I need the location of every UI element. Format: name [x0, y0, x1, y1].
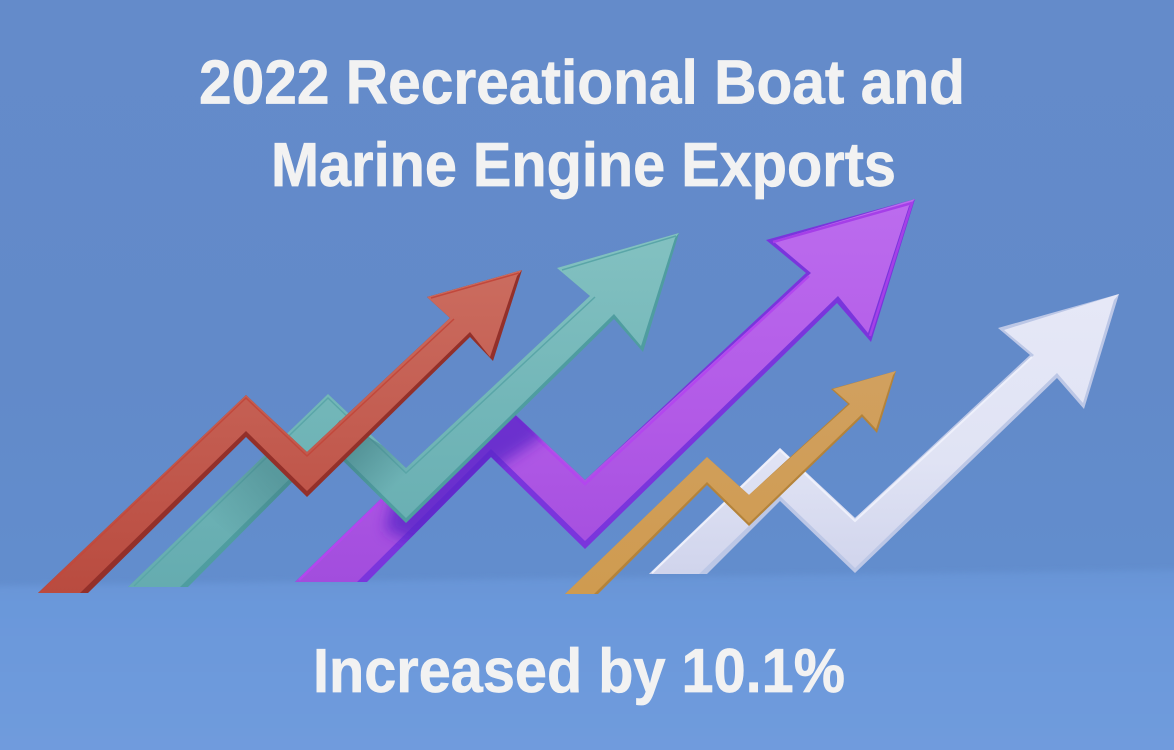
title — [199, 48, 965, 200]
arrow: purple — [295, 199, 915, 582]
callout: increase: Increased by 10.1% — [313, 637, 845, 706]
title: Marine Engine Exports — [271, 131, 896, 200]
arrow: teal — [128, 233, 679, 587]
arrow: red — [38, 270, 522, 593]
title: 2022 Recreational Boat and — [199, 48, 965, 118]
floor — [0, 570, 1174, 750]
arrow: white — [649, 294, 1119, 574]
arrow: orange — [565, 371, 896, 594]
